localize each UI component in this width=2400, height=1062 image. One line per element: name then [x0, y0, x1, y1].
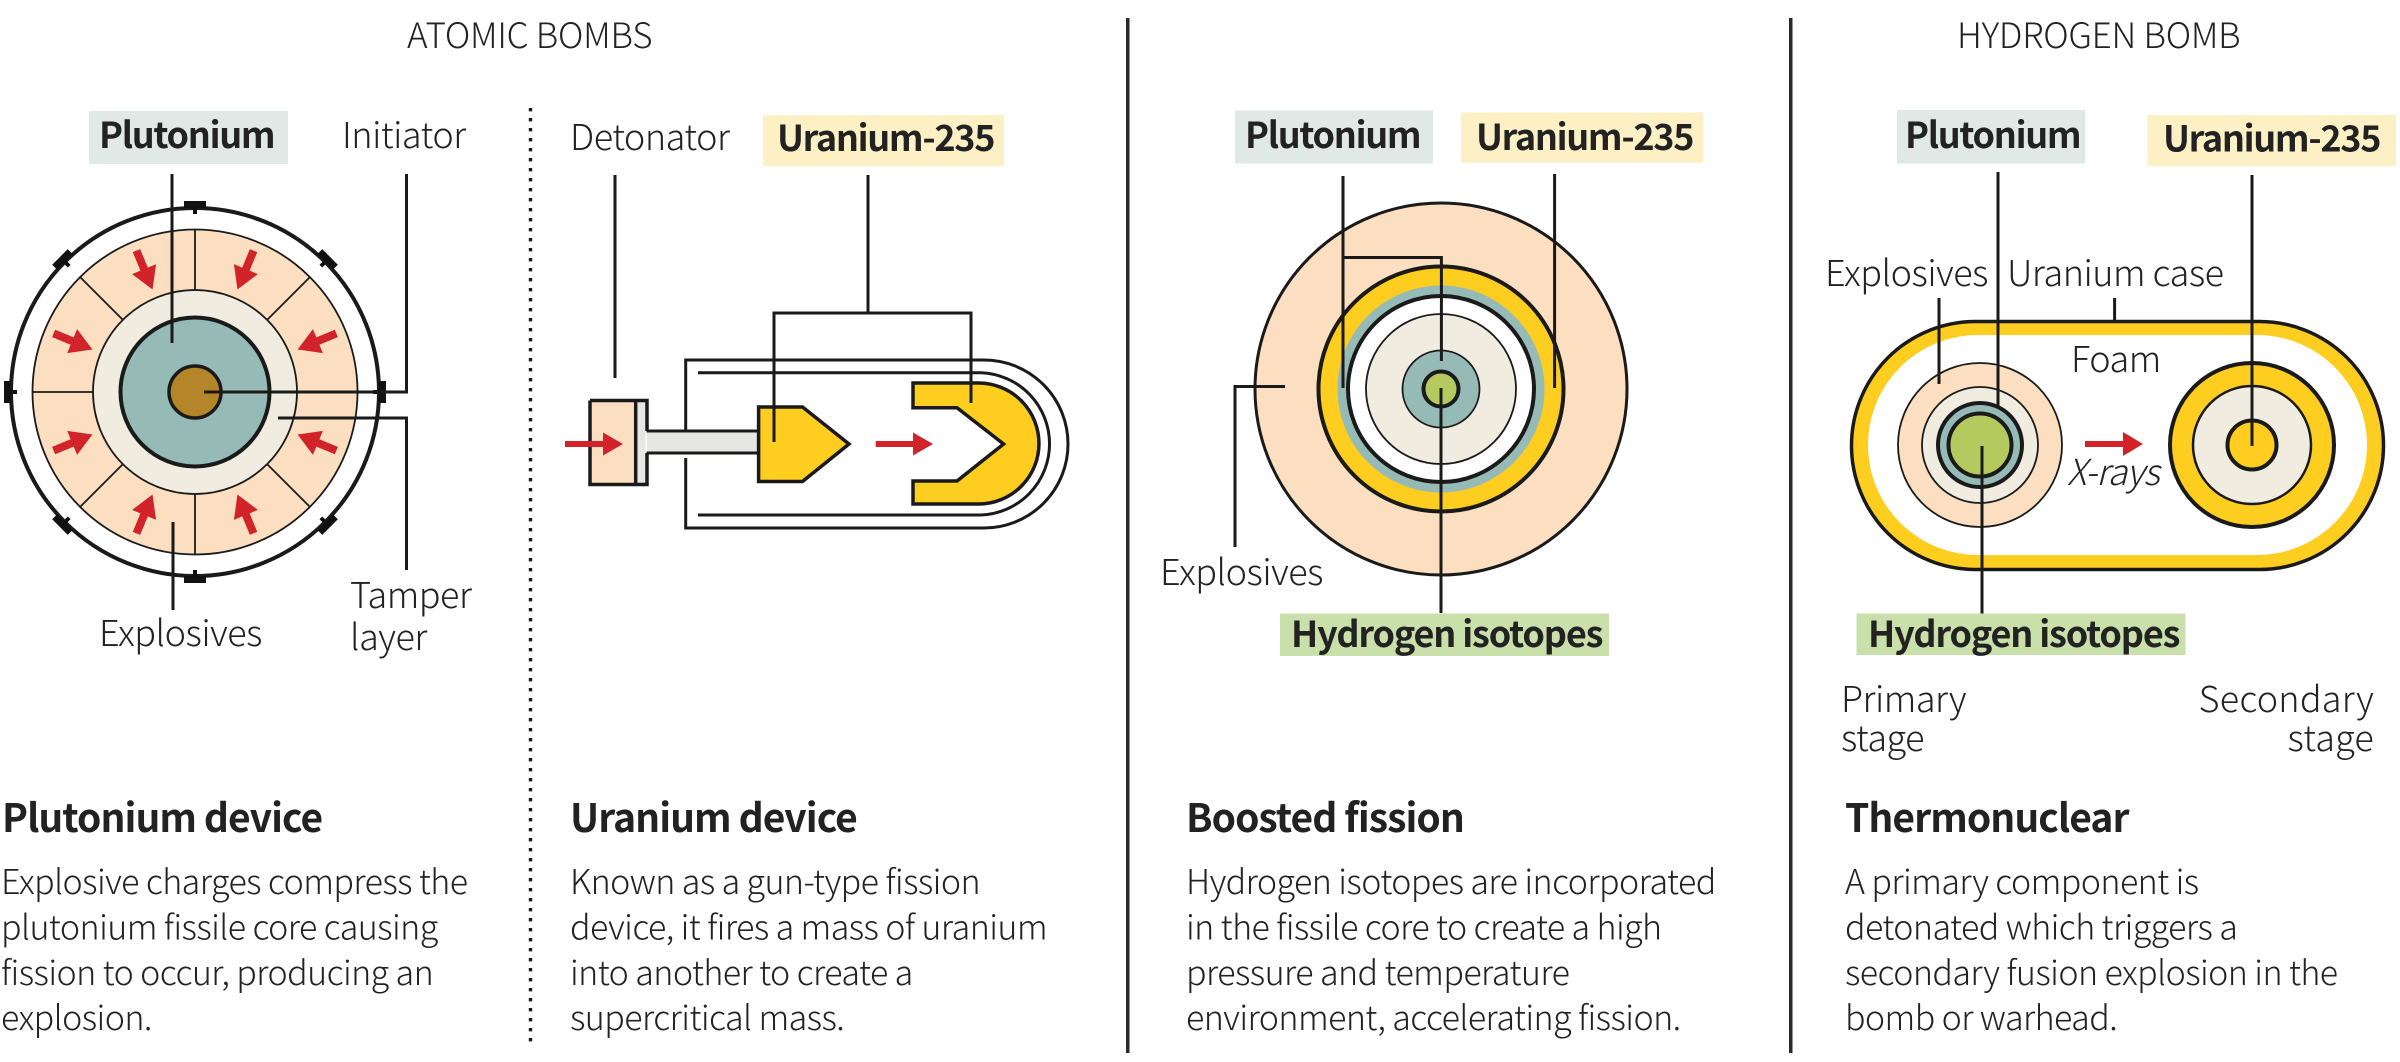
- label: x-rays: X-rays: [2067, 444, 2162, 496]
- label: plutonium: Plutonium: [99, 107, 274, 159]
- label: explosives: Explosives: [1825, 245, 1988, 297]
- label: hydrogen isotopes: Hydrogen isotopes: [1291, 606, 1603, 658]
- text: boosted description: environment, accelerating fission.: [1186, 991, 1681, 1040]
- diagram: plutonium implosion sphere: [4, 201, 386, 583]
- text: plutonium description: plutonium fissile core causing: [1, 900, 439, 950]
- text: boosted description: Hydrogen isotopes are incorporated: [1186, 855, 1716, 904]
- text: uranium description: supercritical mass.: [570, 991, 844, 1040]
- heading: plutonium device: Plutonium device: [2, 788, 322, 844]
- label: tamper layer: Tamper: [350, 567, 471, 619]
- label: plutonium: Plutonium: [1245, 107, 1420, 159]
- text: uranium description: into another to create a: [570, 946, 913, 995]
- text: boosted description: in the fissile core to create a high: [1186, 900, 1661, 950]
- label: detonator: Detonator: [570, 109, 731, 161]
- panel: boosted fission: [1160, 107, 1716, 1040]
- text: plutonium description: explosion.: [1, 991, 152, 1040]
- text: boosted description: pressure and temperature: [1186, 946, 1569, 995]
- label: plutonium: Plutonium: [1905, 107, 2080, 159]
- leader lines: uranium device: [615, 175, 971, 442]
- diagram: thermonuclear capsule: [1852, 322, 2384, 570]
- label: explosives: Explosives: [99, 605, 262, 657]
- label: explosives: Explosives: [1160, 544, 1323, 596]
- leader lines: thermonuclear: [1939, 172, 2252, 614]
- panel: thermonuclear: [1825, 107, 2396, 1040]
- divider: dotted between plutonium and uranium devices: [529, 108, 532, 1047]
- text: uranium description: Known as a gun-type fission: [570, 855, 980, 904]
- panel: uranium device: [565, 109, 1068, 1040]
- text: thermonuclear description: detonated which triggers a: [1845, 900, 2237, 950]
- label: uranium case: Uranium case: [2007, 245, 2224, 297]
- label: tamper layer: layer: [350, 609, 428, 661]
- label: hydrogen isotopes: Hydrogen isotopes: [1868, 606, 2180, 658]
- label: secondary stage: Secondary: [2199, 671, 2374, 723]
- panel: plutonium device: [1, 107, 473, 1040]
- divider: atomic and boosted: [1126, 18, 1130, 1053]
- diagram: gun-type device: [565, 360, 1068, 528]
- divider: boosted and hydrogen: [1789, 18, 1792, 1053]
- text: thermonuclear description: A primary component is: [1845, 855, 2199, 904]
- label: uranium-235: Uranium-235: [2163, 110, 2380, 162]
- label: secondary stage: stage: [2288, 710, 2374, 762]
- label: uranium-235: Uranium-235: [777, 110, 994, 162]
- heading: uranium device: Uranium device: [570, 788, 857, 844]
- label: primary stage: Primary: [1841, 671, 1966, 723]
- text: plutonium description: fission to occur, producing an: [1, 946, 433, 995]
- leader lines: boosted fission: [1235, 174, 1555, 613]
- label: uranium-235: Uranium-235: [1476, 109, 1693, 161]
- text: thermonuclear description: bomb or warhead.: [1845, 991, 2117, 1040]
- label: foam: Foam: [2071, 331, 2161, 383]
- heading: boosted fission: Boosted fission: [1186, 788, 1464, 844]
- text: uranium description: device, it fires a mass of uranium: [570, 900, 1047, 950]
- section heading: atomic bombs: ATOMIC BOMBS: [407, 8, 652, 59]
- diagram: boosted fission sphere: [1255, 203, 1627, 575]
- text: plutonium description: Explosive charges compress the: [1, 855, 467, 904]
- leader lines: plutonium device: [172, 174, 406, 610]
- heading: thermonuclear: Thermonuclear: [1845, 788, 2130, 844]
- label: primary stage: stage: [1841, 710, 1924, 762]
- text: thermonuclear description: secondary fusion explosion in the: [1845, 946, 2338, 995]
- section heading: hydrogen bomb: HYDROGEN BOMB: [1957, 8, 2240, 59]
- label: initiator: Initiator: [342, 107, 467, 159]
